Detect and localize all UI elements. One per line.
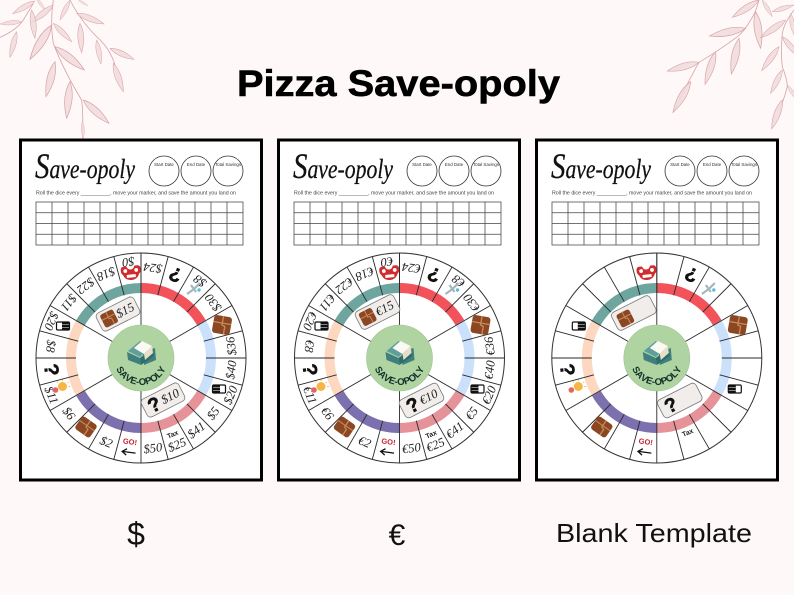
heading: Save-opoly script: Save-opoly bbox=[35, 146, 135, 186]
instruction line: Roll the dice every __________, move your marker, and save the amount you land on bbox=[552, 190, 752, 196]
goal circles: End Date bbox=[703, 162, 722, 167]
board spaces bbox=[555, 261, 748, 456]
board spaces: $18 bbox=[94, 264, 118, 284]
board spaces: $24 bbox=[143, 260, 163, 276]
board spaces: $36 bbox=[223, 335, 239, 356]
heading: Save-opoly script: Save-opoly bbox=[293, 146, 393, 186]
board spaces: €11 bbox=[316, 291, 338, 314]
board spaces: ? bbox=[424, 261, 444, 286]
board spaces: €40 bbox=[482, 359, 498, 380]
decoration: leaves top left bbox=[0, 0, 135, 138]
board spaces: €22 bbox=[332, 275, 356, 297]
goal circles: Total Savings bbox=[215, 162, 242, 167]
board spaces: €0 bbox=[379, 254, 394, 270]
board spaces: $20 bbox=[41, 310, 61, 333]
wheel center label: SAVE-OPOLY bbox=[113, 364, 169, 388]
panel: dollar version bbox=[20, 140, 262, 480]
tracking grid bbox=[552, 202, 759, 245]
card: chest bonus: €15 bbox=[373, 298, 396, 319]
board spaces: $8 bbox=[190, 271, 209, 290]
card: question bonus: $10 bbox=[159, 386, 182, 407]
goal circles: Start Date bbox=[670, 162, 690, 167]
goal circles: Total Savings bbox=[731, 162, 758, 167]
board spaces: €41 bbox=[443, 419, 467, 441]
board spaces: Tax bbox=[425, 430, 438, 441]
board spaces: €20 bbox=[300, 310, 320, 333]
board spaces: €50 bbox=[401, 440, 422, 456]
board spaces: $22 bbox=[74, 275, 97, 297]
board spaces bbox=[298, 254, 499, 456]
goal circles: End Date bbox=[445, 162, 464, 167]
panel: euro version bbox=[278, 140, 520, 480]
board spaces: $20 bbox=[221, 383, 241, 406]
goal circles bbox=[665, 156, 759, 186]
goal circles: End Date bbox=[187, 162, 206, 167]
goal circles bbox=[149, 156, 243, 186]
game wheel bbox=[36, 253, 246, 463]
instruction line: Roll the dice every __________, move your marker, and save the amount you land on bbox=[36, 190, 236, 196]
board spaces: €25 bbox=[424, 435, 447, 455]
board spaces: $5 bbox=[204, 404, 223, 423]
heading: Save-opoly script: Save-opoly bbox=[551, 146, 651, 186]
board spaces: $30 bbox=[201, 290, 224, 314]
board spaces: €8 bbox=[449, 271, 468, 290]
title: Pizza Save-opoly bbox=[237, 63, 560, 104]
board spaces: €8 bbox=[301, 339, 317, 354]
board spaces: $2 bbox=[98, 433, 115, 451]
card: chest bonus bbox=[610, 294, 657, 332]
board spaces: ? bbox=[39, 362, 62, 377]
card: question bonus bbox=[140, 382, 187, 420]
card: chest bonus bbox=[95, 296, 141, 332]
board spaces: Tax bbox=[166, 430, 180, 441]
board spaces: €6 bbox=[318, 404, 337, 423]
board spaces: ? bbox=[555, 362, 578, 377]
board spaces: GO! bbox=[122, 436, 138, 447]
board spaces: €30 bbox=[460, 290, 483, 314]
board spaces: GO! bbox=[381, 436, 396, 447]
board spaces: GO! bbox=[638, 436, 653, 447]
caption: blank template: Blank Template bbox=[556, 518, 752, 548]
board spaces: $41 bbox=[185, 419, 208, 441]
card: question bonus: ? bbox=[403, 393, 423, 419]
card: question bonus: €10 bbox=[417, 386, 441, 407]
goal circles bbox=[407, 156, 501, 186]
board spaces: $25 bbox=[166, 435, 188, 455]
board spaces: €18 bbox=[353, 264, 376, 284]
panel: blank template bbox=[536, 140, 778, 480]
goal circles: Start Date bbox=[412, 162, 432, 167]
tracking grid bbox=[36, 202, 243, 245]
instruction line: Roll the dice every __________, move your marker, and save the amount you land on bbox=[294, 190, 494, 196]
board spaces: €36 bbox=[481, 335, 498, 356]
card: question bonus: ? bbox=[144, 393, 165, 418]
board spaces: ? bbox=[166, 261, 186, 286]
board spaces: $6 bbox=[59, 404, 79, 423]
card: chest bonus bbox=[354, 293, 401, 331]
decoration: leaves top right bbox=[666, 0, 794, 130]
board spaces: €20 bbox=[479, 383, 499, 406]
board spaces: €24 bbox=[401, 260, 422, 276]
board spaces: ? bbox=[682, 261, 701, 286]
board spaces: $11 bbox=[42, 384, 61, 406]
board spaces: €2 bbox=[356, 433, 373, 451]
card: question bonus bbox=[398, 382, 446, 421]
caption: dollar: $ bbox=[127, 516, 145, 552]
goal circles: Start Date bbox=[154, 162, 174, 167]
board spaces: $0 bbox=[120, 254, 135, 270]
tracking grid bbox=[294, 202, 501, 245]
board spaces: $40 bbox=[223, 359, 239, 380]
game wheel bbox=[294, 253, 504, 463]
board spaces: $50 bbox=[143, 440, 164, 456]
board spaces: €5 bbox=[462, 404, 481, 423]
board spaces: €11 bbox=[300, 384, 320, 406]
card: chest bonus: $15 bbox=[114, 300, 137, 321]
caption: euro: € bbox=[389, 519, 406, 552]
wheel center label: SAVE-OPOLY bbox=[372, 364, 427, 388]
wheel center label: SAVE-OPOLY bbox=[629, 364, 685, 388]
board spaces: ? bbox=[298, 362, 321, 377]
card: question bonus bbox=[656, 382, 704, 421]
goal circles: Total Savings bbox=[473, 162, 500, 167]
card: question bonus: ? bbox=[661, 393, 682, 419]
board spaces: $11 bbox=[58, 291, 80, 314]
game wheel bbox=[552, 253, 762, 463]
board spaces bbox=[39, 254, 241, 456]
board spaces: $8 bbox=[43, 339, 59, 354]
board spaces: Tax bbox=[681, 428, 695, 439]
